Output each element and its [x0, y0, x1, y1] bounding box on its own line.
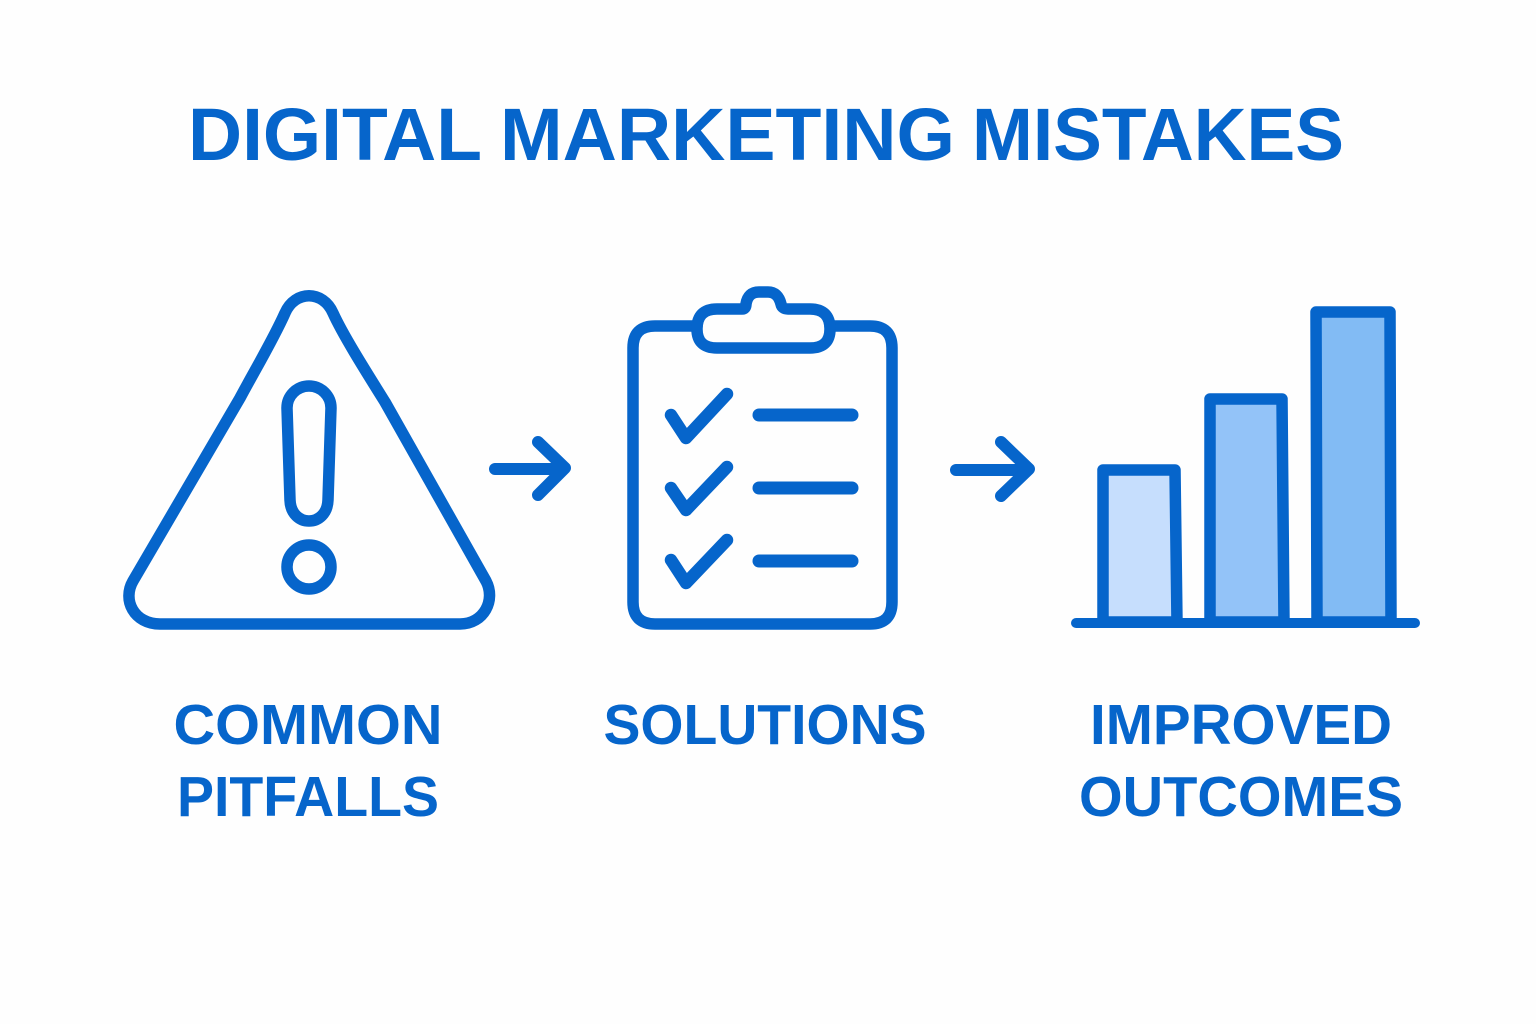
icon: clipboard checklist	[633, 292, 892, 624]
label: solutions: SOLUTIONS	[604, 693, 926, 757]
icon: warning triangle	[129, 296, 490, 624]
bar: medium	[1210, 399, 1284, 622]
icon: bar chart	[1076, 312, 1415, 623]
title: MISTAKES	[972, 93, 1344, 176]
title	[188, 93, 1344, 176]
baseline	[1076, 618, 1415, 628]
label: improved outcomes	[1079, 693, 1403, 829]
arrow: solutions to outcomes	[956, 442, 1029, 496]
label: common pitfalls: COMMON	[174, 693, 442, 757]
bar: large	[1316, 312, 1391, 622]
label: improved outcomes: IMPROVED	[1090, 693, 1392, 757]
label: improved outcomes: OUTCOMES	[1079, 765, 1403, 829]
label: common pitfalls	[174, 693, 442, 829]
arrow: pitfalls to solutions	[495, 442, 565, 495]
label: common pitfalls: PITFALLS	[177, 765, 439, 829]
title: MARKETING	[500, 93, 955, 176]
bar: small	[1103, 470, 1177, 622]
title: DIGITAL	[188, 93, 482, 176]
